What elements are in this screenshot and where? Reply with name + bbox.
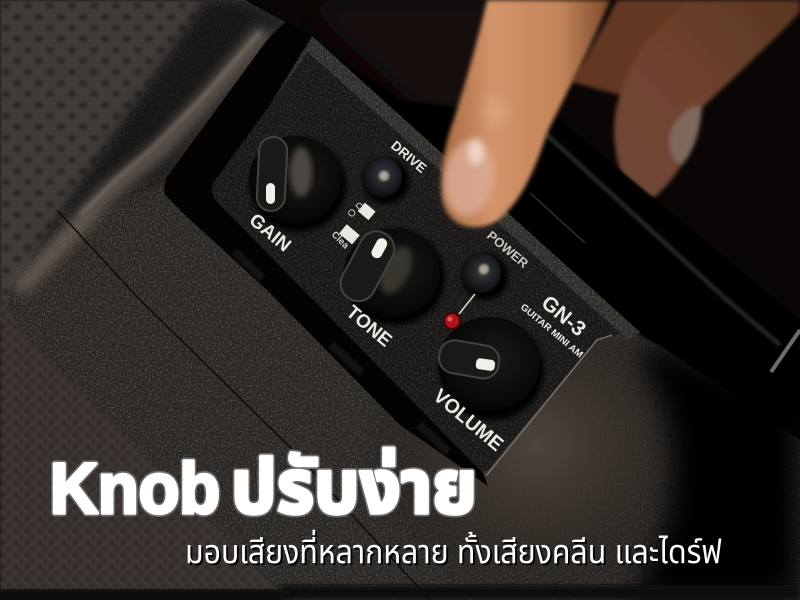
darker tube rim at top left xyxy=(12,0,280,285)
label: model GN-3: GN-3 xyxy=(537,291,590,341)
top edge of amp: black slot by the finger xyxy=(285,22,800,420)
title xyxy=(50,445,477,530)
label: gain: GAIN xyxy=(245,210,295,256)
control panel recess xyxy=(164,22,488,486)
hand: blurred back fingers xyxy=(572,0,800,197)
lit front corner xyxy=(360,285,710,600)
right front corner edge xyxy=(486,335,612,476)
knob: gain xyxy=(249,136,346,232)
antenna rod xyxy=(771,330,800,372)
highlight ridge on rim xyxy=(18,30,265,290)
textured band along top of plate xyxy=(306,36,640,340)
label: power: POWER xyxy=(484,228,532,271)
subtitle: มอบเสียงที่หลากหลาย ทั้งเสียงคลีน และไดร์ฟ xyxy=(187,531,724,572)
bottom dark band of mesh xyxy=(0,590,290,600)
switch: drive xyxy=(362,157,409,204)
seam line xyxy=(57,210,430,600)
led: power indicator with line xyxy=(443,294,475,330)
lower bottom dark fade xyxy=(280,585,800,600)
knob: volume xyxy=(437,317,544,420)
knob: tone xyxy=(335,225,445,325)
selector icon: OD and Clean marks: Clea xyxy=(329,229,351,252)
title word: Knob: Knob xyxy=(50,450,220,529)
falloff to black at right xyxy=(625,340,800,600)
control panel plate xyxy=(212,36,640,472)
selector icon: OD and Clean marks: O D xyxy=(346,200,367,220)
pointing finger xyxy=(439,0,610,227)
label: volume: VOLUME xyxy=(429,385,507,456)
label: guitar mini amp: GUITAR MINI AM xyxy=(518,302,585,360)
panel labels xyxy=(245,138,590,456)
title word: ปรับง่าย: ปรับง่าย xyxy=(231,445,477,530)
label: tone: TONE xyxy=(342,302,395,352)
selector icon: OD and Clean marks xyxy=(329,200,376,252)
label: drive: DRIVE xyxy=(388,138,429,176)
title word: Knob: Knob xyxy=(50,450,220,529)
title word: ปรับง่าย: ปรับง่าย xyxy=(231,445,477,530)
switch: power xyxy=(461,253,508,300)
grille slots under the panel xyxy=(235,252,262,278)
subtitle: มอบเสียงที่หลากหลาย ทั้งเสียงคลีน และไดร์ฟ xyxy=(185,529,722,570)
